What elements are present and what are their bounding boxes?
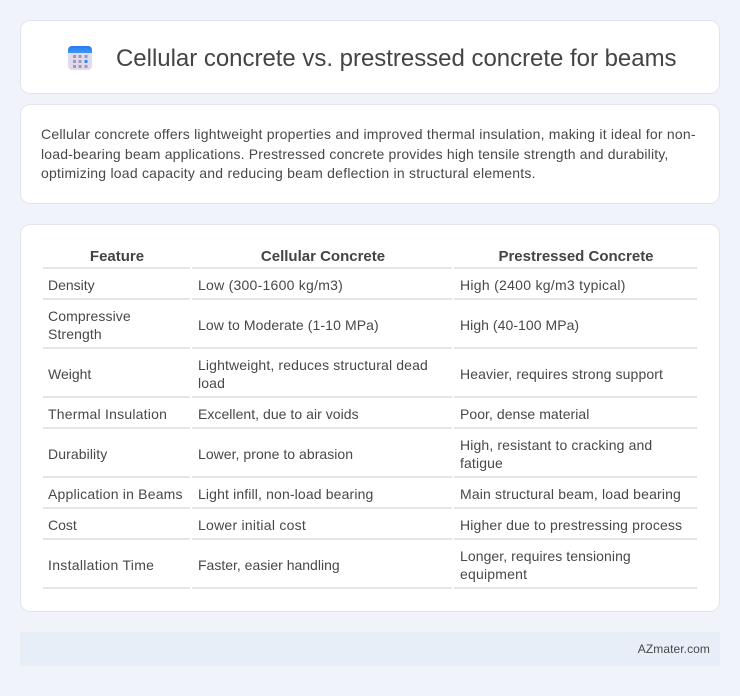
intro text: Cellular concrete offers lightweight properties and improved thermal insulation, making it ideal for non- [41, 126, 696, 142]
table header row: Feature [90, 248, 144, 265]
row: application in beams [48, 486, 681, 502]
row: compressive strength: Low to Moderate (1-10 MPa) [198, 317, 379, 333]
row: weight: Lightweight, reduces structural dead [198, 357, 428, 373]
row: cost: Cost [48, 517, 77, 533]
panel: comparison table [20, 224, 720, 612]
row: installation time [48, 548, 631, 582]
panel: title card [20, 20, 720, 94]
row: thermal insulation: Poor, dense material [460, 406, 589, 422]
row: thermal insulation [48, 406, 589, 422]
row: durability: High, resistant to cracking and [460, 437, 652, 453]
table header row: Prestressed Concrete [498, 248, 654, 265]
footer [20, 632, 720, 666]
icon: calendar [68, 46, 92, 70]
row: cost [48, 517, 682, 533]
row: compressive strength: High (40-100 MPa) [460, 317, 579, 333]
row: thermal insulation: Excellent, due to air voids [198, 406, 359, 422]
row: compressive strength [48, 308, 579, 342]
intro text: load-bearing beam applications. Prestressed concrete provides high tensile strength and durability, [41, 146, 668, 162]
intro text [41, 126, 696, 181]
row: thermal insulation: Thermal Insulation [48, 406, 167, 422]
row: durability: Durability [48, 446, 107, 462]
row: application in beams: Light infill, non-load bearing [198, 486, 373, 502]
row: density: High (2400 kg/m3 typical) [460, 277, 626, 293]
row: installation time: equipment [460, 566, 527, 582]
row: installation time: Installation Time [48, 557, 154, 573]
row: installation time: Longer, requires tensioning [460, 548, 631, 564]
row: application in beams: Main structural beam, load bearing [460, 486, 681, 502]
row: weight: load [198, 375, 225, 391]
row: weight: Heavier, requires strong support [460, 366, 663, 382]
row: density [48, 277, 626, 293]
title: Cellular concrete vs. prestressed concrete for beams [116, 45, 677, 72]
table header row: Cellular Concrete [261, 248, 385, 265]
row: weight: Weight [48, 366, 91, 382]
row: application in beams: Application in Beams [48, 486, 183, 502]
panel: introduction [20, 104, 720, 204]
row: cost: Lower initial cost [198, 517, 306, 533]
row: durability [48, 437, 652, 471]
row: weight [48, 357, 663, 391]
row: density: Low (300-1600 kg/m3) [198, 277, 343, 293]
intro text: optimizing load capacity and reducing beam deflection in structural elements. [41, 165, 536, 181]
footer credit: AZmater.com [638, 642, 710, 656]
row: compressive strength: Strength [48, 326, 102, 342]
row: density: Density [48, 277, 95, 293]
row: installation time: Faster, easier handling [198, 557, 340, 573]
row: durability: fatigue [460, 455, 503, 471]
row: durability: Lower, prone to abrasion [198, 446, 353, 462]
row: cost: Higher due to prestressing process [460, 517, 682, 533]
row: compressive strength: Compressive [48, 308, 131, 324]
table header row [90, 248, 654, 265]
